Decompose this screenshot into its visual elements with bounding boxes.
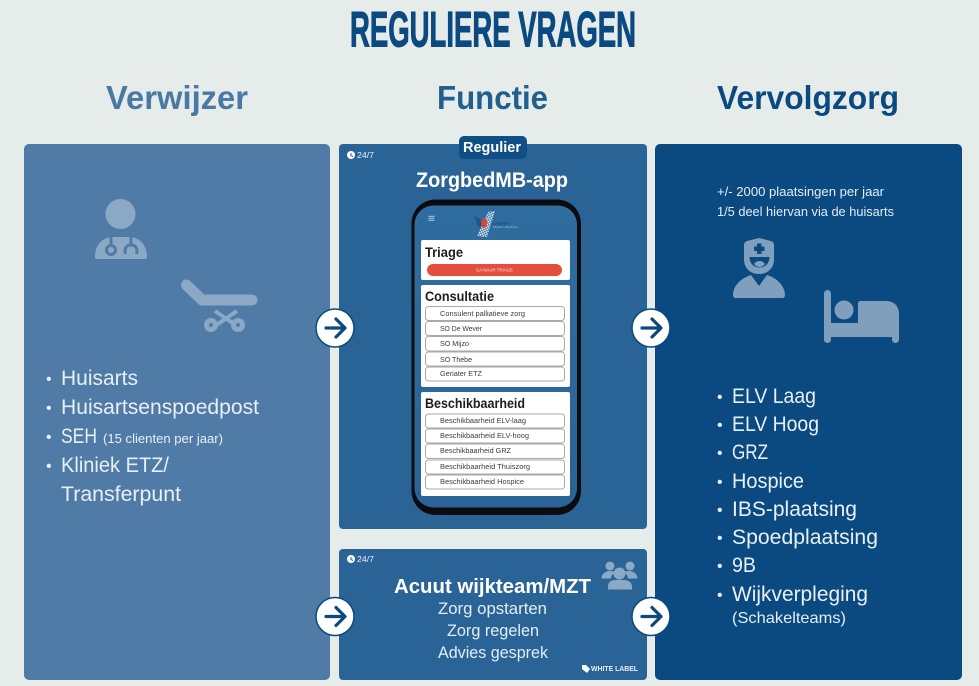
list: vervolgzorg: •	[717, 502, 723, 519]
heading: Vervolgzorg: Vervolgzorg	[717, 79, 899, 116]
list: vervolgzorg: ELV Hoog	[732, 413, 819, 436]
list: vervolgzorg: Spoedplaatsing	[732, 526, 878, 549]
list: vervolgzorg: (Schakelteams)	[732, 610, 846, 627]
list: verwijzers: •	[46, 371, 52, 388]
list: vervolgzorg: •	[717, 389, 723, 406]
logo: Midden-Brabant	[493, 225, 518, 229]
card: consultatie: Consultatie	[425, 289, 494, 304]
heading: Functie: Functie	[437, 79, 548, 116]
phone	[412, 200, 581, 515]
list: verwijzers: SEH	[61, 425, 97, 448]
list: vervolgzorg: ELV Laag	[732, 385, 816, 408]
heading: ZorgbedMB-app: ZorgbedMB-app	[416, 168, 568, 192]
list: verwijzers	[46, 367, 259, 506]
card: beschikbaarheid: Beschikbaarheid GRZ	[440, 448, 512, 455]
arrow: verwijzer naar wijkteam	[316, 598, 354, 636]
list: vervolgzorg: •	[717, 558, 723, 575]
list: verwijzers: •	[46, 400, 52, 417]
list: verwijzers: Transferpunt	[61, 483, 181, 506]
badge: 24/7: 24/7	[357, 151, 375, 160]
text: wijkteam functies: Zorg opstarten	[438, 599, 547, 618]
list: vervolgzorg: •	[717, 530, 723, 547]
card: beschikbaarheid: Beschikbaarheid	[425, 396, 525, 411]
list: verwijzers: Huisarts	[61, 367, 138, 390]
badge: 24/7 wijkteam	[347, 555, 375, 564]
list: verwijzers: •	[46, 458, 52, 475]
list: vervolgzorg: GRZ	[732, 441, 768, 464]
title: REGULIERE VRAGEN	[350, 2, 636, 58]
card: triage	[421, 240, 570, 280]
label: white label: WHITE LABEL	[591, 664, 638, 673]
list: vervolgzorg	[717, 385, 878, 627]
panel: vervolgzorg	[655, 144, 962, 680]
heading: Acuut wijkteam/MZT: Acuut wijkteam/MZT	[394, 575, 591, 598]
card: triage: GA NAAR TRIAGE	[476, 268, 513, 272]
badge: 24/7	[347, 151, 375, 160]
card: beschikbaarheid: Beschikbaarheid Thuiszorg	[440, 464, 530, 471]
panel: acuut wijkteam	[339, 549, 647, 680]
card: triage: Triage	[425, 245, 463, 260]
text: wijkteam functies: Advies gesprek	[438, 643, 548, 662]
badge: 24/7 wijkteam: 24/7	[357, 555, 375, 564]
text: plaatsingen: 1/5 deel hiervan via de huisarts	[717, 204, 894, 219]
list: verwijzers: Kliniek ETZ/	[61, 454, 169, 477]
list: verwijzers: (15 clienten per jaar)	[103, 431, 223, 446]
list: vervolgzorg: •	[717, 445, 723, 462]
list: verwijzers: •	[46, 429, 52, 446]
tag: Regulier: Regulier	[463, 140, 521, 156]
card: consultatie: Geriater ETZ	[440, 371, 483, 378]
icon: stretcher	[186, 285, 252, 332]
panel: verwijzer	[24, 144, 330, 680]
icon: nurse	[733, 238, 785, 298]
card: consultatie: SO Mijzo	[440, 341, 469, 348]
icon: bed	[824, 290, 899, 343]
list: verwijzers: Huisartsenspoedpost	[61, 396, 259, 419]
icon: team	[602, 562, 638, 590]
card: beschikbaarheid: Beschikbaarheid Hospice	[440, 479, 524, 486]
list: vervolgzorg: •	[717, 417, 723, 434]
text: wijkteam functies: Zorg regelen	[447, 621, 539, 640]
arrow: verwijzer naar app	[316, 309, 354, 347]
card: beschikbaarheid: Beschikbaarheid ELV-laag	[440, 418, 526, 425]
card: consultatie: Consulent palliatieve zorg	[440, 311, 525, 318]
text: wijkteam functies	[438, 599, 548, 662]
text: plaatsingen: +/- 2000 plaatsingen per jaar	[717, 184, 885, 199]
list: vervolgzorg: •	[717, 474, 723, 491]
icon: menu	[428, 216, 434, 220]
list: vervolgzorg: Wijkverpleging	[732, 583, 868, 606]
panel: zorgbedMB-app	[339, 136, 647, 529]
list: vervolgzorg: Hospice	[732, 470, 804, 493]
arrow: wijkteam naar vervolgzorg	[632, 598, 670, 636]
tag: Regulier	[459, 136, 527, 159]
card: consultatie: SO De Wever	[440, 326, 483, 333]
list: vervolgzorg: •	[717, 587, 723, 604]
card: beschikbaarheid	[421, 392, 570, 496]
arrow: app naar vervolgzorg	[632, 309, 670, 347]
logo: Zorgbed	[491, 222, 509, 226]
card: beschikbaarheid: Beschikbaarheid ELV-hoog	[440, 433, 529, 440]
heading: Verwijzer: Verwijzer	[106, 79, 248, 116]
card: consultatie: SO Thebe	[440, 357, 472, 364]
list: vervolgzorg: IBS-plaatsing	[732, 498, 857, 521]
list: vervolgzorg: 9B	[732, 554, 756, 577]
text: plaatsingen	[717, 184, 894, 219]
logo	[473, 211, 518, 237]
icon: doctor	[95, 199, 147, 259]
card: consultatie	[421, 285, 570, 387]
